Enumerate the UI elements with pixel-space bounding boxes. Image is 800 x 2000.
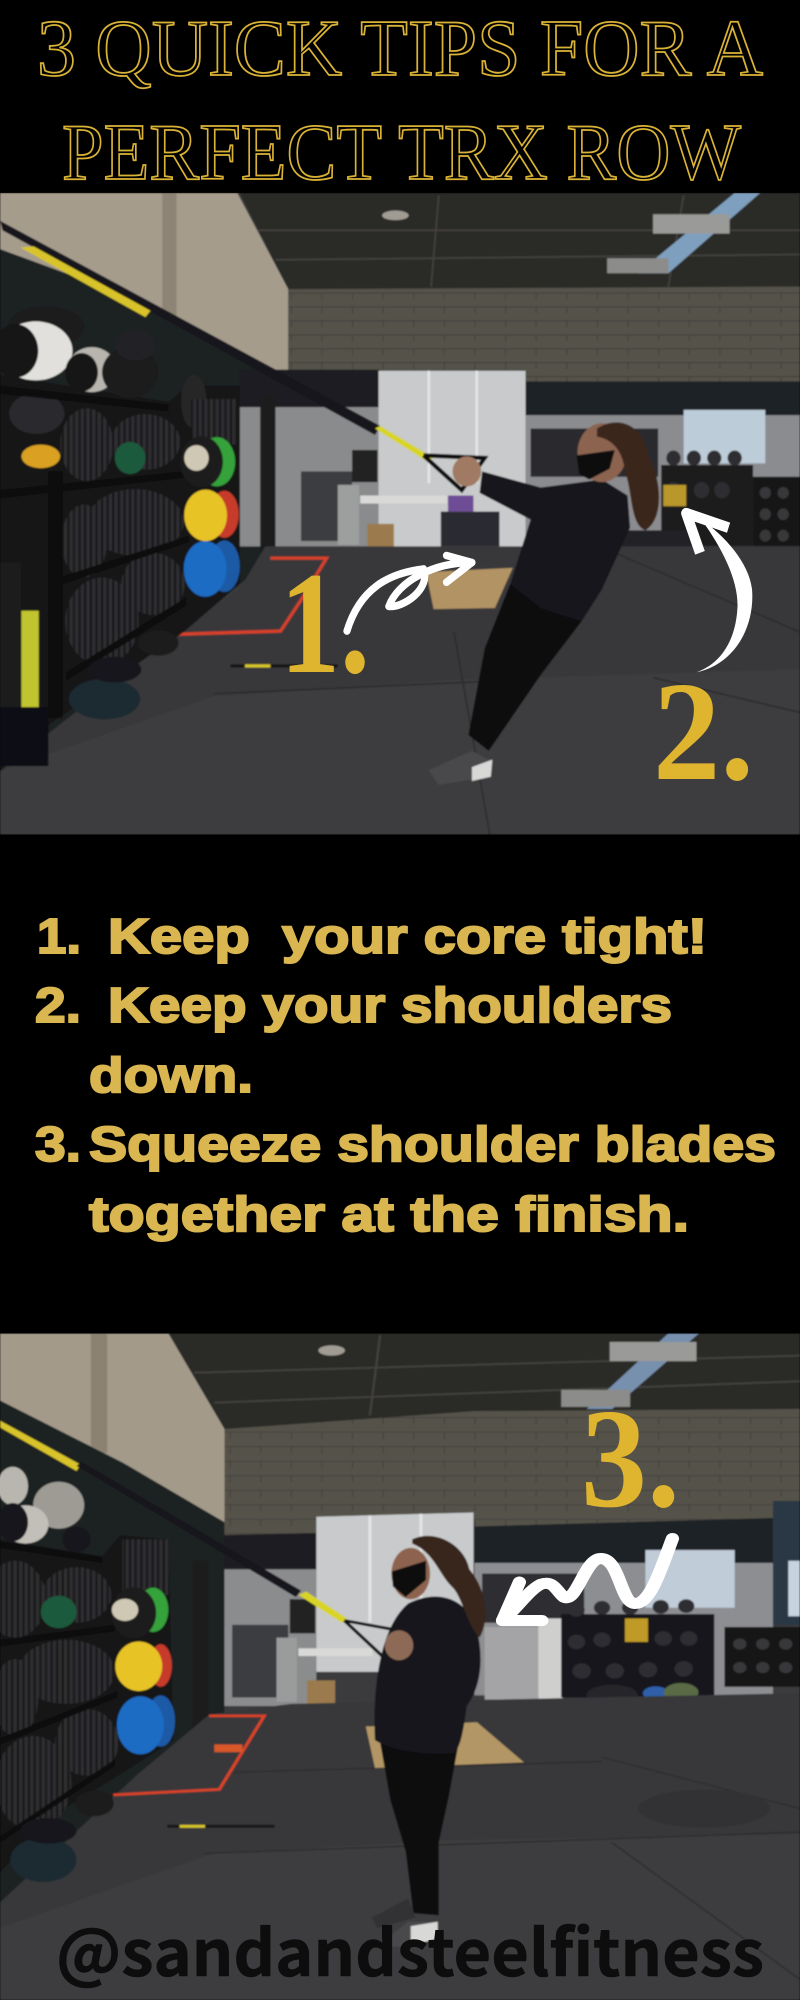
title	[37, 5, 763, 197]
tip 1: 1.	[37, 910, 81, 964]
arrow 2: white curved arrow	[686, 513, 752, 672]
tip 3: together at the finish.	[89, 1188, 689, 1242]
title: 3 QUICK TIPS FOR A	[37, 5, 763, 93]
tip 2: 2.	[35, 979, 81, 1033]
number 3: 3.	[581, 1379, 680, 1537]
arrow 3: white zigzag arrow	[503, 1539, 672, 1621]
tip 2: down.	[89, 1049, 253, 1103]
photo: TRX row finish position	[0, 1333, 800, 2000]
social handle: @sandandsteelfitness	[56, 1903, 764, 1995]
tip 1: Keep your core tight!	[108, 910, 707, 964]
tip 2	[35, 979, 672, 1103]
tips list	[35, 910, 776, 1242]
tip 3: 3.	[35, 1118, 81, 1172]
number 2: 2.	[653, 652, 754, 810]
tip 3: Squeeze shoulder blades	[89, 1118, 776, 1172]
arrow 1: white looped arrow	[347, 556, 472, 631]
tip 2: Keep your shoulders	[108, 979, 672, 1033]
tip 3	[35, 1118, 776, 1242]
title: PERFECT TRX ROW	[62, 109, 742, 197]
photo: TRX row lean-back position	[0, 193, 800, 835]
number 1: 1.	[280, 542, 370, 704]
